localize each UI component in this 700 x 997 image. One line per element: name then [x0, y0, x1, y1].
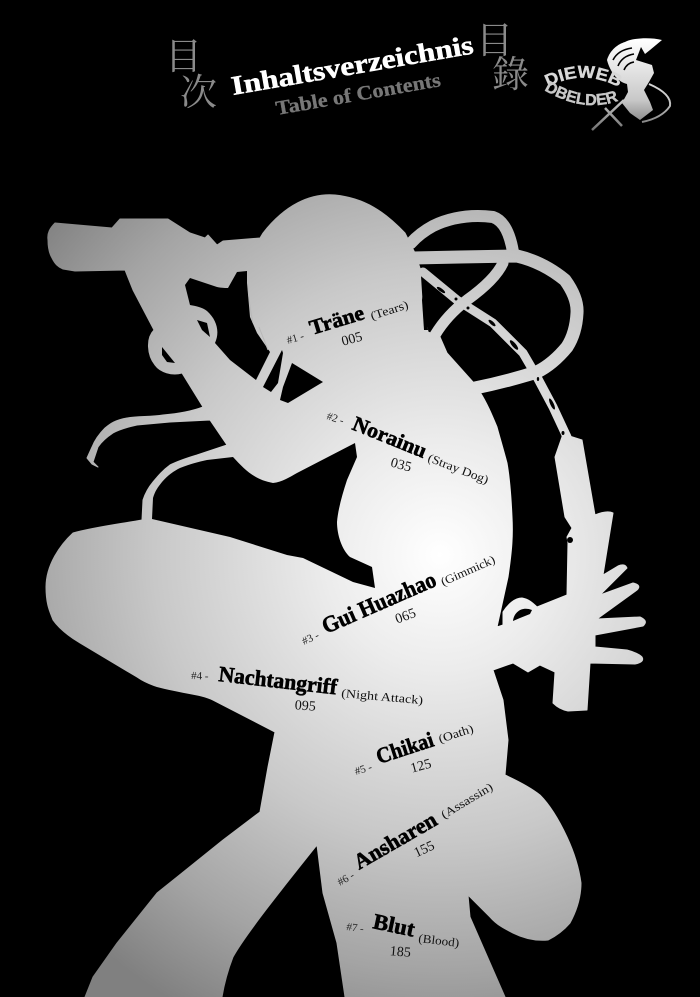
entry 3: 065 — [393, 606, 418, 627]
entry 5: 125 — [409, 757, 433, 777]
entry 1: 005 — [340, 330, 364, 350]
entry 2: #2 - — [325, 410, 346, 427]
entry 1: Träne — [306, 300, 367, 340]
logo hair sweep — [642, 84, 670, 122]
entry 7: Blut — [371, 908, 418, 942]
logo — [544, 38, 672, 131]
entry 7 — [346, 908, 460, 961]
entry 2: 035 — [389, 456, 413, 476]
entry 7: 185 — [389, 944, 411, 961]
gap between arm and head — [185, 271, 270, 380]
entry 3: Gui Huazhao — [318, 567, 440, 639]
entry 6: #6 - — [336, 869, 357, 889]
logo X — [592, 100, 624, 130]
entry 6: 155 — [412, 839, 437, 861]
chain links — [436, 286, 564, 435]
entry 4: Nachtangriff — [217, 661, 339, 700]
kanji left — [165, 26, 217, 116]
entry 6: Ansharen — [349, 807, 441, 874]
logo lettering: DIEWEB — [544, 66, 620, 86]
kanji right: 錄 — [492, 44, 529, 98]
entry 3 — [300, 552, 497, 648]
entry 6: (Assassin) — [438, 780, 495, 822]
rope loops — [411, 216, 577, 388]
ring holes — [162, 320, 573, 621]
entry 1 — [285, 297, 410, 350]
title: Inhaltsverzeichnis: Inhaltsverzeichnis — [229, 30, 475, 101]
kanji left: 目 — [165, 26, 202, 80]
entry 4: 095 — [294, 698, 316, 715]
logo hair swirl — [613, 48, 634, 70]
kanji right: 目 — [476, 10, 513, 64]
logo: DBELDER — [544, 80, 619, 106]
entry 4: (Night Attack) — [341, 686, 424, 707]
collar gaps — [263, 286, 428, 403]
gap between arm and leg — [152, 443, 375, 588]
entry 3: (Gimmick) — [439, 552, 497, 589]
entry 7: (Blood) — [418, 931, 460, 950]
entry 2 — [325, 410, 491, 487]
body outline — [46, 195, 645, 997]
entry 5: #5 - — [353, 761, 374, 778]
entry 5: Chikai — [373, 727, 437, 769]
kanji left: 次 — [180, 62, 217, 116]
entry 3: #3 - — [300, 629, 321, 648]
logo figure — [607, 38, 662, 120]
entry 4 — [191, 661, 424, 715]
entry 2: (Stray Dog) — [426, 451, 491, 487]
header title — [229, 30, 475, 120]
hair strands — [248, 284, 268, 350]
entry 7: #7 - — [346, 921, 365, 935]
entry 4: #4 - — [191, 670, 209, 683]
entry 6 — [336, 780, 495, 889]
entry 5: (Oath) — [437, 721, 475, 746]
entry 1: (Tears) — [369, 297, 410, 323]
chain — [423, 272, 567, 437]
entry 1: #1 - — [285, 330, 306, 347]
entry 2: Norainu — [349, 411, 431, 463]
kanji right — [476, 10, 529, 98]
subtitle: Table of Contents: Table of Contents — [274, 69, 443, 120]
entry 5 — [353, 721, 475, 778]
silhouette figure — [46, 195, 645, 997]
